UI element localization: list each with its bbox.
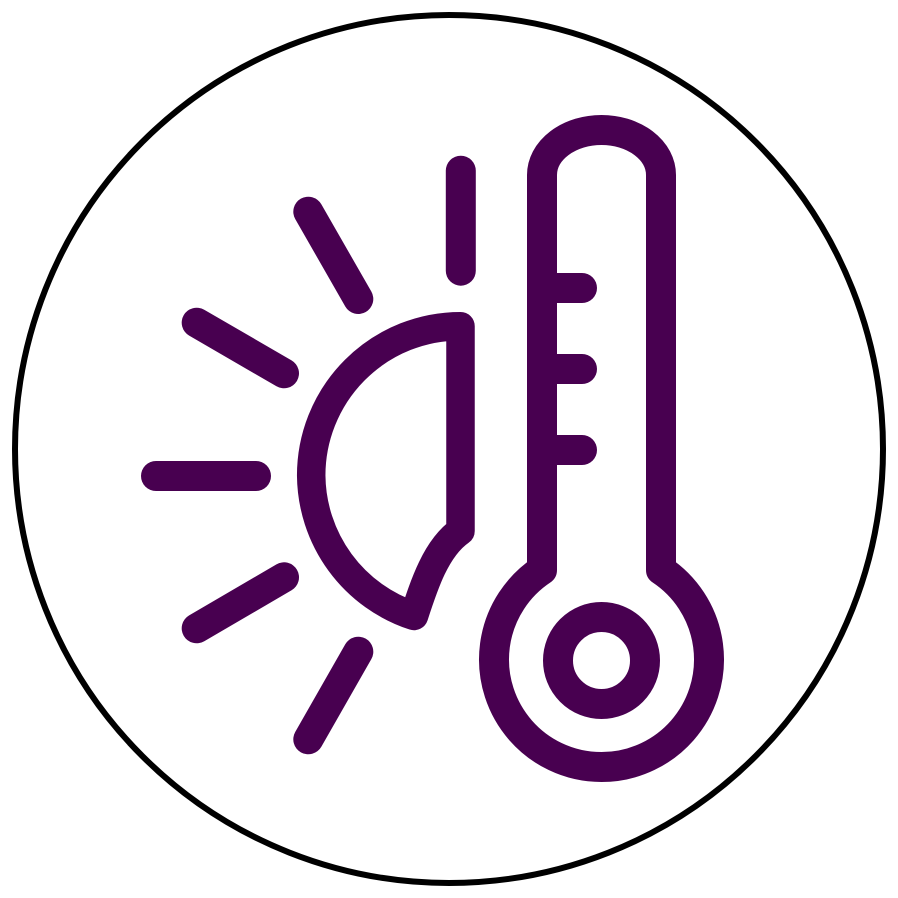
thermometer tube and bulb — [494, 130, 709, 767]
icon: thermometer — [494, 130, 709, 767]
scale ticks — [542, 288, 582, 450]
half sun body — [311, 326, 460, 616]
icon: sun — [156, 171, 461, 739]
sun rays — [156, 171, 461, 739]
inner bulb ring — [558, 617, 645, 704]
